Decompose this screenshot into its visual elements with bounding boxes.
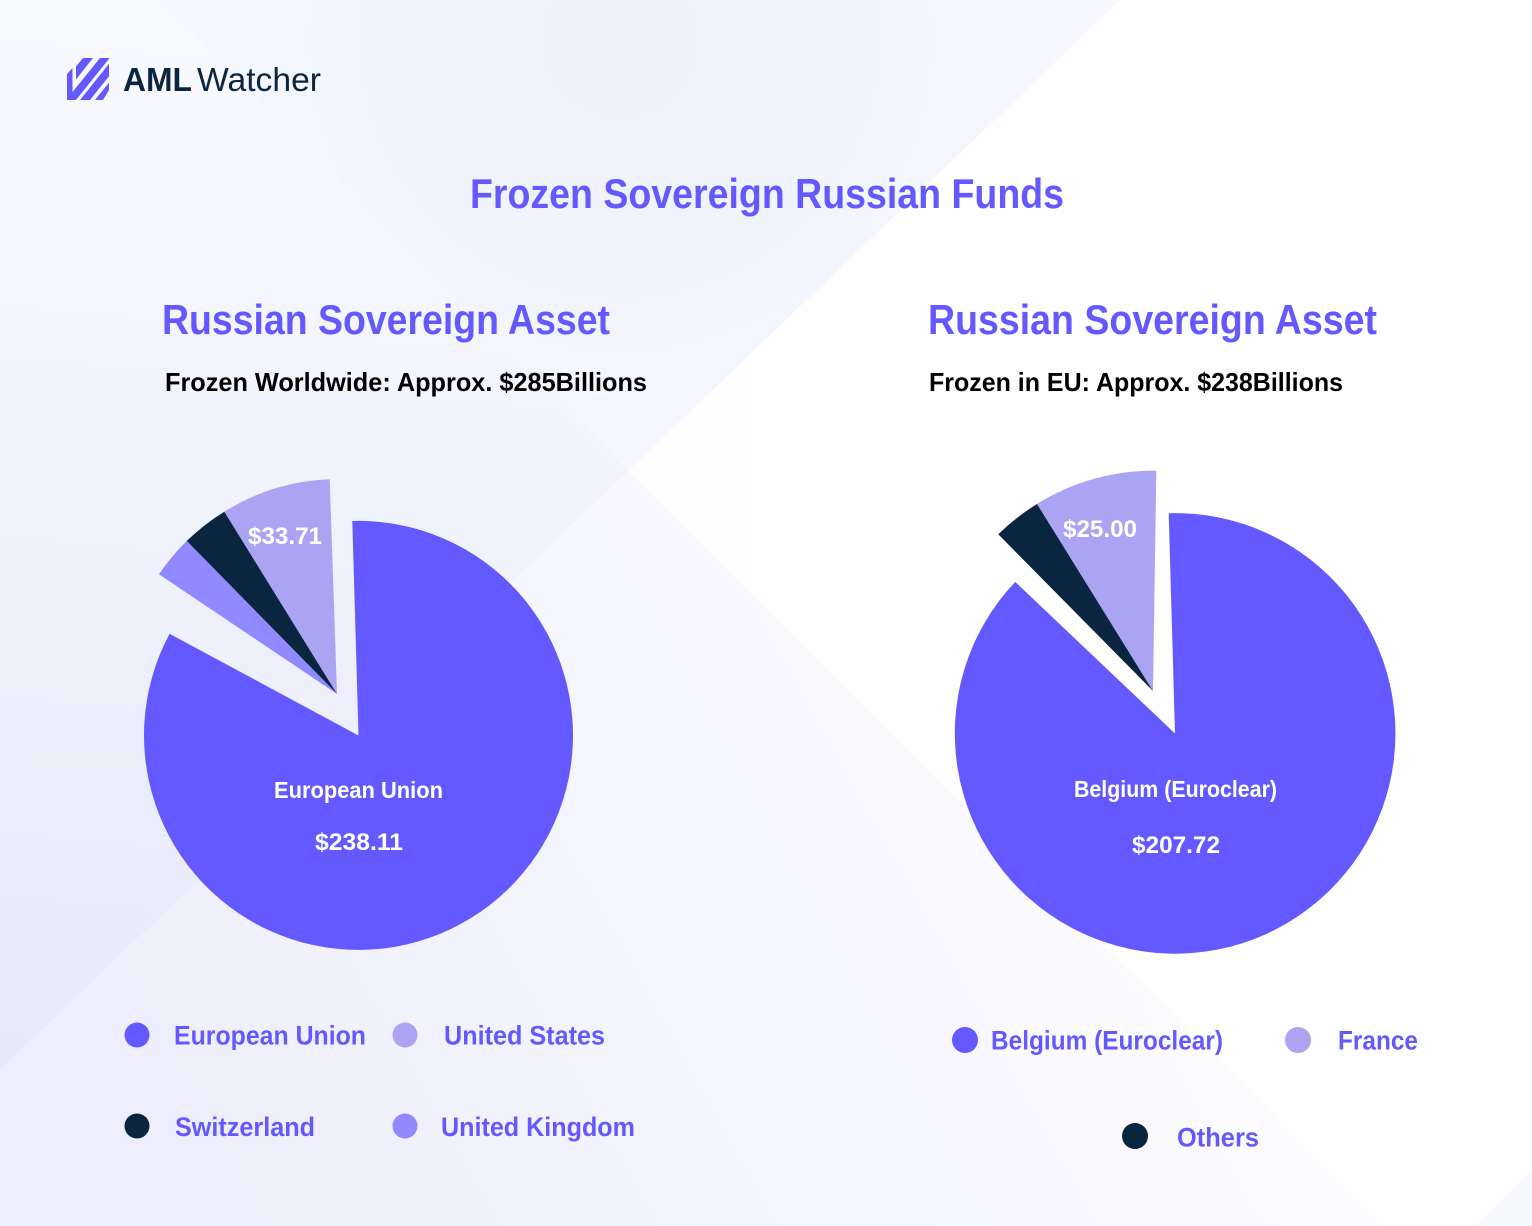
slice: United States — [224, 479, 337, 694]
value: United States: $33.71 — [248, 523, 322, 550]
heading: worldwide: Russian Sovereign Asset — [162, 296, 610, 343]
legend: worldwide — [124, 1020, 635, 1142]
pie chart: EU — [955, 471, 1395, 954]
logo: AML Watcher: Watcher — [197, 61, 321, 98]
panel: European Union — [928, 296, 1418, 1152]
label: Belgium: Belgium (Euroclear) — [1074, 776, 1277, 802]
slice: Others — [998, 504, 1153, 691]
logo: AML Watcher — [67, 58, 321, 100]
legend item: Others: Others — [1177, 1122, 1259, 1152]
legend item: France: France — [1338, 1026, 1418, 1056]
value: European Union: $238.11 — [315, 829, 403, 856]
pie chart: worldwide — [144, 479, 573, 950]
legend item: France — [1285, 1026, 1418, 1056]
legend item: United States: United States — [444, 1020, 605, 1050]
wordmark: AML — [123, 61, 192, 98]
panel: worldwide — [124, 296, 647, 1142]
subheading: EU total: Frozen in EU: Approx. $238Billions — [929, 367, 1343, 397]
slice: France — [1037, 471, 1156, 691]
slice: Switzerland — [187, 512, 337, 694]
icon: striped logo mark — [67, 58, 109, 100]
legend: EU — [952, 1026, 1418, 1152]
label: European Union: European Union — [274, 777, 443, 803]
legend item: Switzerland — [124, 1112, 315, 1142]
slice: Belgium (Euroclear) — [955, 513, 1395, 954]
slice: European Union — [144, 521, 573, 950]
value: Belgium: $207.72 — [1132, 832, 1220, 859]
title: Frozen Sovereign Russian Funds — [470, 170, 1064, 217]
legend item: United Kingdom: United Kingdom — [441, 1112, 635, 1142]
heading: EU: Russian Sovereign Asset — [928, 296, 1377, 343]
subheading: worldwide total: Frozen Worldwide: Approx. $285Billions — [165, 367, 647, 397]
slice: United Kingdom — [159, 541, 337, 694]
legend item: European Union: European Union — [174, 1020, 366, 1050]
legend item: Switzerland: Switzerland — [175, 1112, 315, 1142]
legend item: Others — [1122, 1122, 1259, 1152]
value: France: $25.00 — [1063, 516, 1137, 543]
legend item: Belgium: Belgium (Euroclear) — [991, 1026, 1223, 1056]
